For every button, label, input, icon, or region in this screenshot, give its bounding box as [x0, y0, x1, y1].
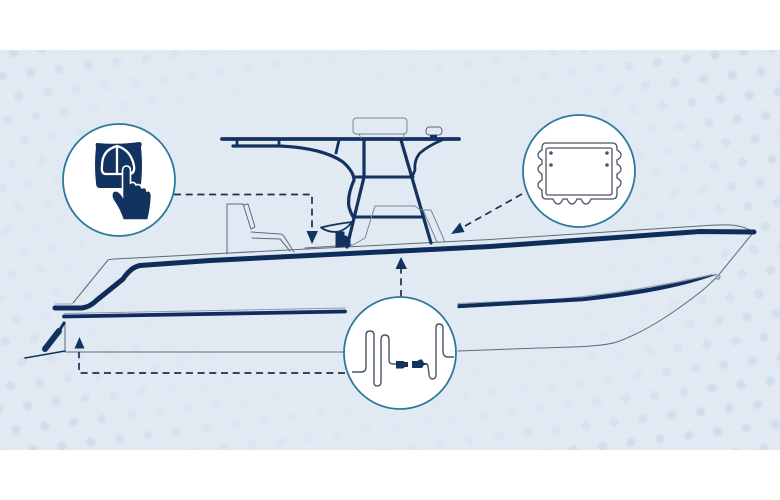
- gunwale highlight at stern: [55, 303, 72, 305]
- radar dome: [353, 118, 407, 138]
- background band: [0, 50, 780, 450]
- T-top frame: [222, 139, 459, 247]
- infographic: boat system diagram: [0, 50, 780, 450]
- console: [353, 206, 445, 245]
- callout: wiring harness: [344, 297, 456, 409]
- rub rail highlight: [64, 274, 712, 314]
- icon: touch panel with boat: [95, 142, 142, 188]
- dashed connector: harness to gunwale: [396, 257, 407, 297]
- dashed connector: harness to transom: [74, 337, 345, 373]
- callout: touchscreen control: [63, 124, 175, 236]
- helm and steering wheel: [321, 222, 352, 247]
- icon: right cable: [425, 324, 454, 379]
- icon: pointing hand: [112, 166, 152, 220]
- outboard trim tab: [25, 323, 65, 358]
- rub rail thick line: [64, 312, 345, 316]
- rub rail bow section: [458, 274, 716, 308]
- icon: socket: [412, 360, 427, 368]
- callout: control module: [523, 115, 635, 227]
- icon: left cable: [352, 331, 397, 386]
- dashed connector: module to console: [451, 194, 522, 234]
- gunwale thick line: [55, 232, 754, 308]
- hull thin outlines: [65, 225, 754, 352]
- boat illustration: [25, 118, 754, 358]
- antenna: [426, 127, 442, 138]
- dashed connector: touchscreen to helm: [174, 194, 318, 244]
- seat: [227, 204, 294, 254]
- icon: boat outline: [102, 146, 134, 174]
- icon: plug: [396, 361, 408, 368]
- bow fitting: [716, 275, 720, 279]
- icon: module housing: [538, 143, 621, 204]
